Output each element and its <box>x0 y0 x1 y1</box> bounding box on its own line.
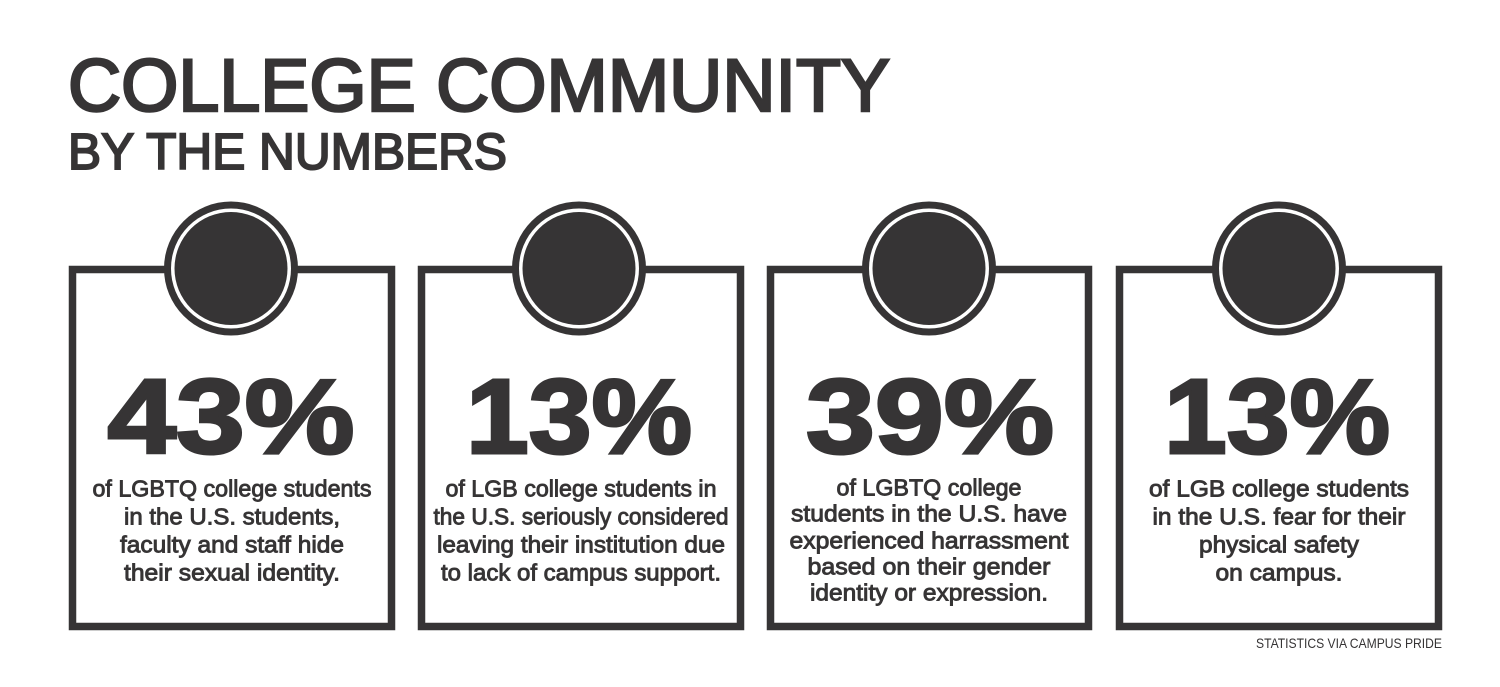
title: BY THE NUMBERS <box>68 123 507 180</box>
statistic: 13% <box>1164 358 1390 476</box>
description: their sexual identity. <box>124 560 340 586</box>
panel: 39% <box>770 202 1088 626</box>
icon: circle badge <box>1212 202 1346 336</box>
panel: 13% fear <box>1120 202 1438 626</box>
panel: 13% considered leaving <box>422 202 740 626</box>
description <box>434 476 728 586</box>
panel: 43% <box>72 202 392 626</box>
description: experienced harrassment <box>790 528 1069 554</box>
description: based on their gender <box>808 554 1051 580</box>
statistic: 43% <box>108 358 354 476</box>
description <box>92 476 372 586</box>
statistic: 39% <box>806 358 1054 476</box>
description: of LGB college students in <box>446 476 716 502</box>
icon: circle badge <box>164 202 298 336</box>
description: of LGBTQ college <box>836 474 1022 500</box>
icon: circle badge <box>512 202 646 336</box>
description: on campus. <box>1216 560 1342 586</box>
description: identity or expression. <box>810 580 1048 606</box>
description: to lack of campus support. <box>441 560 721 586</box>
description: faculty and staff hide <box>120 532 344 558</box>
description: the U.S. seriously considered <box>434 504 728 530</box>
description: leaving their institution due <box>437 532 725 558</box>
title: COLLEGE COMMUNITY <box>68 44 890 127</box>
description: physical safety <box>1199 532 1359 558</box>
icon: circle badge <box>862 202 996 336</box>
title <box>68 44 890 180</box>
description: in the U.S. students, <box>124 504 340 530</box>
description: of LGB college students <box>1149 476 1409 502</box>
description: in the U.S. fear for their <box>1152 504 1406 530</box>
description: of LGBTQ college students <box>92 476 372 502</box>
statistic: 13% <box>466 358 692 476</box>
source note: STATISTICS VIA CAMPUS PRIDE <box>1256 635 1442 651</box>
description <box>790 474 1069 606</box>
description: students in the U.S. have <box>791 500 1067 526</box>
description <box>1149 476 1409 586</box>
